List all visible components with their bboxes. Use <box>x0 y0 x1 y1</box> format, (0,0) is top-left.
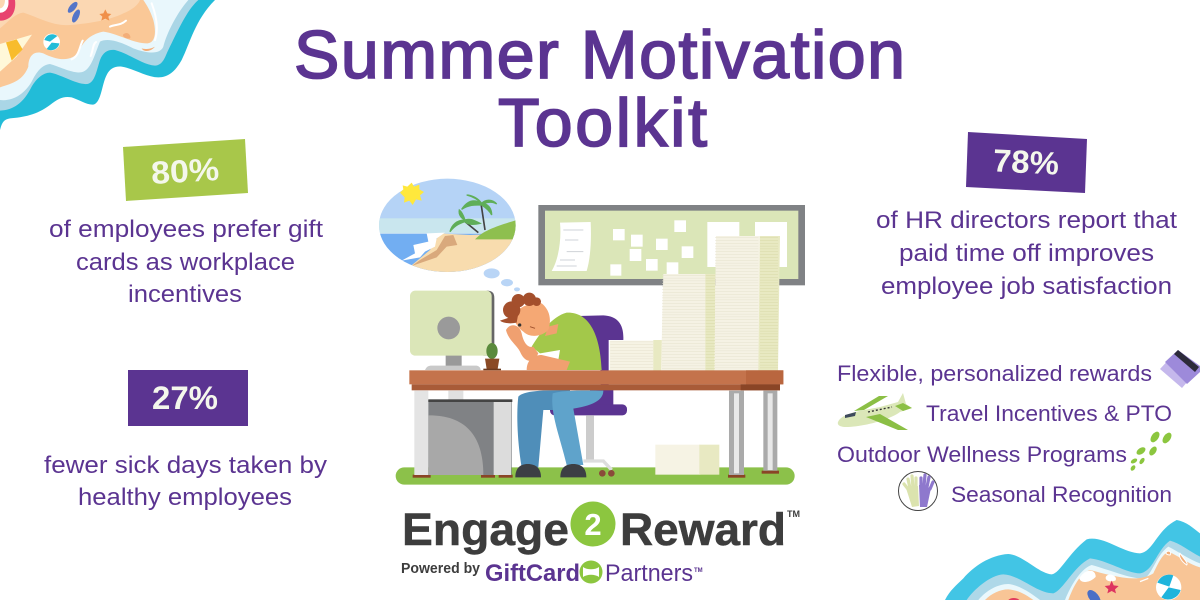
logo: Engage2Reward <box>402 502 800 555</box>
logo: Engage2Reward: Reward <box>620 504 786 555</box>
ground and floor papers <box>396 445 795 485</box>
list item: outdoor wellness: Outdoor Wellness Programs <box>837 442 1127 467</box>
filing cabinet <box>414 391 512 475</box>
title: Toolkit <box>498 85 707 161</box>
icon: gift cards <box>1160 350 1200 388</box>
text: paid time off: paid time off improves <box>899 240 1154 267</box>
title: Summer Motivation <box>294 17 905 93</box>
text: sick days <box>44 452 327 511</box>
logo badge: partners <box>580 560 602 584</box>
text: paid time off: employee job satisfaction <box>881 273 1172 300</box>
logo badge: 2: 2 <box>584 507 602 542</box>
logo: Powered by GiftCard Partners: Partners <box>605 560 693 587</box>
logo: Powered by GiftCard Partners: GiftCard <box>485 560 580 587</box>
beach ball <box>43 34 60 50</box>
text: paid time off <box>876 207 1177 300</box>
list item: flexible rewards: Flexible, personalized rewards <box>837 361 1152 386</box>
text: gift card preference <box>49 216 323 308</box>
thought bubble: beach <box>377 177 520 291</box>
list item: seasonal recognition: Seasonal Recognition <box>951 482 1172 507</box>
bulletin board <box>538 205 805 285</box>
towel <box>1008 598 1019 600</box>
cactus plant <box>483 343 501 370</box>
text: sick days: healthy employees <box>78 484 292 511</box>
stat: 80 percent <box>123 139 248 201</box>
sunscreen tube <box>0 35 32 72</box>
worker <box>500 293 603 477</box>
logo badge: 2 <box>570 502 616 546</box>
icon: high five <box>898 472 938 510</box>
logo: Engage2Reward: Engage <box>402 504 569 555</box>
beach corner: bottom right <box>945 520 1200 600</box>
logo: Powered by GiftCard Partners <box>401 560 703 587</box>
desk <box>409 370 783 475</box>
stat: 80 percent: 80% <box>150 151 220 191</box>
list item: flexible rewards <box>837 350 1200 388</box>
logo: Engage2Reward: TM <box>787 509 800 519</box>
text: sick days: fewer sick days taken by <box>44 452 327 479</box>
stat: 27 percent <box>128 370 248 426</box>
stat: 27 percent: 27% <box>152 380 218 416</box>
icon: airplane <box>838 393 912 430</box>
list item: seasonal recognition <box>898 472 1172 510</box>
beach ball <box>1156 575 1181 600</box>
text: gift card preference: of employees prefer gift <box>49 216 323 243</box>
icon: footprints <box>1130 430 1173 472</box>
list item: travel: Travel Incentives & PTO <box>926 401 1172 426</box>
list item: outdoor wellness <box>837 430 1173 472</box>
text: gift card preference: incentives <box>128 281 242 308</box>
swim ring <box>0 0 15 21</box>
paper stacks on desk <box>610 236 780 371</box>
logo: Powered by GiftCard Partners: TM <box>694 568 703 574</box>
stat: 78 percent: 78% <box>992 142 1060 182</box>
stat: 78 percent <box>966 132 1087 193</box>
logo: Powered by GiftCard Partners: Powered by <box>401 561 480 577</box>
starfish <box>99 9 111 21</box>
illustration: worker at desk <box>377 177 805 485</box>
flip flop <box>1085 588 1103 600</box>
flip flops <box>66 0 82 24</box>
office chair <box>550 315 627 477</box>
text: paid time off: of HR directors report that <box>876 207 1177 234</box>
text: gift card preference: cards as workplace <box>76 249 295 276</box>
beach corner: top left <box>0 0 215 130</box>
title <box>294 17 905 161</box>
list item: travel <box>838 393 1172 430</box>
starfish <box>1105 581 1119 593</box>
computer monitor <box>410 291 494 370</box>
